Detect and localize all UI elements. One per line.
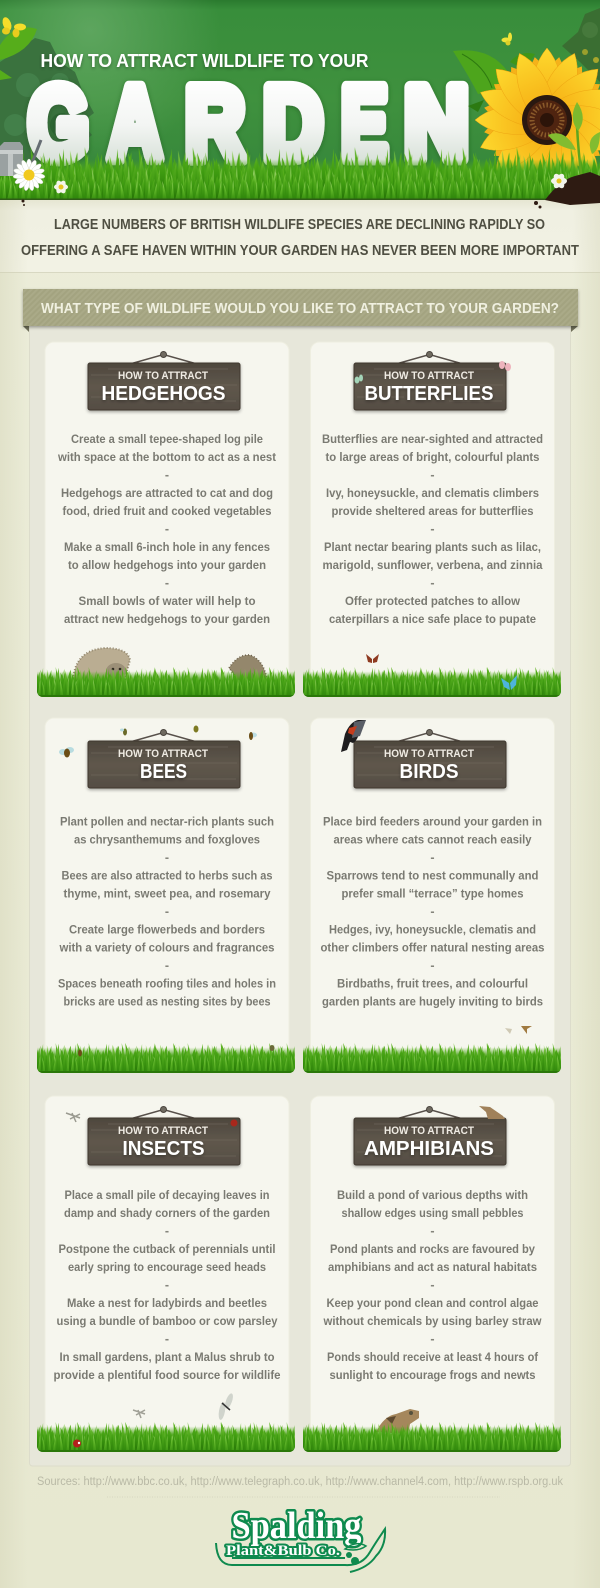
icon: toad on sign	[479, 1106, 505, 1119]
header banner	[0, 0, 600, 208]
icon: blue butterfly	[501, 675, 517, 690]
sign: birds	[354, 730, 506, 788]
sign: butterflies: HOW TO ATTRACT	[384, 370, 474, 382]
text: bird tips: Sparrows tend to nest communally and	[326, 868, 538, 882]
icon: bee 2	[120, 728, 127, 736]
text: insect tips: -	[165, 1278, 169, 1292]
text: bird tips: Hedges, ivy, honeysuckle, clematis and	[329, 922, 536, 936]
text: butterfly tips: Butterflies are near-sighted and attracted	[322, 432, 543, 446]
text: butterfly tips: to large areas of bright, colourful plants	[326, 450, 540, 464]
text: amphibian tips: without chemicals by using barley straw	[323, 1314, 542, 1328]
text: hedgehog tips	[57, 432, 276, 626]
text: amphibian tips	[323, 1188, 542, 1382]
text: bird tips: Place bird feeders around your garden in	[323, 814, 542, 828]
text: bird tips: -	[430, 904, 435, 918]
title: GARDEN: D	[263, 66, 323, 182]
text: butterfly tips: caterpillars a nice safe place to pupate	[329, 612, 536, 626]
panel: insects	[37, 1096, 295, 1452]
sign: hedgehogs: HOW TO ATTRACT	[118, 370, 208, 382]
text: amphibian tips: Build a pond of various depths with	[337, 1188, 528, 1202]
text: amphibian tips: -	[430, 1332, 435, 1346]
text: bee tips: -	[165, 958, 169, 972]
text: insect tips: early spring to encourage seed heads	[68, 1260, 266, 1274]
text: insect tips: -	[165, 1224, 169, 1238]
text: hedgehog tips: -	[165, 522, 169, 536]
text: insect tips: using a bundle of bamboo or cow parsley	[56, 1314, 278, 1328]
text: butterfly tips: provide sheltered areas for butterflies	[332, 504, 534, 518]
sign: amphibians: HOW TO ATTRACT	[384, 1125, 474, 1137]
text: bird tips: -	[430, 850, 435, 864]
banner sky	[0, 0, 600, 200]
heading ribbon: WHAT TYPE OF WILDLIFE WOULD YOU LIKE TO ATTRACT TO YOUR GARDEN?	[41, 301, 559, 317]
sign: birds: HOW TO ATTRACT	[384, 748, 474, 760]
sign: amphibians: AMPHIBIANS	[364, 1138, 494, 1160]
text: bee tips: thyme, mint, sweet pea, and rosemary	[64, 886, 271, 900]
text: bird tips: -	[430, 958, 435, 972]
text: insect tips: -	[165, 1332, 169, 1346]
grass: amphibians	[303, 1419, 561, 1452]
text: bee tips: bricks are used as nesting sites by bees	[64, 994, 271, 1008]
panel: hedgehogs	[37, 342, 295, 698]
icon: mosquito	[66, 1113, 80, 1122]
sign: butterflies: BUTTERFLIES	[364, 383, 494, 405]
header grass	[0, 142, 600, 200]
grass: birds	[303, 1040, 561, 1074]
intro text: LARGE NUMBERS OF BRITISH WILDLIFE SPECIES ARE DECLINING RAPIDLY SO	[54, 217, 545, 233]
title: GARDEN: E	[341, 66, 388, 182]
text: butterfly tips: marigold, sunflower, verbena, and zinnia	[322, 558, 543, 572]
icon: bee 3	[194, 726, 198, 732]
daisy small	[54, 179, 68, 195]
text: bird tips: garden plants are hugely inviting to birds	[322, 994, 543, 1008]
text: bee tips	[58, 814, 276, 1008]
text: amphibian tips: sunlight to encourage frogs and newts	[330, 1368, 536, 1382]
icon: large hedgehog	[73, 648, 130, 682]
watering can	[0, 140, 41, 176]
icon: bee 4	[249, 732, 257, 740]
text: bird tips	[320, 814, 545, 1008]
title: GARDEN: N	[404, 66, 469, 182]
icon: small hedgehog	[229, 655, 267, 680]
sign: insects: INSECTS	[122, 1138, 204, 1160]
text: bee tips: Bees are also attracted to herbs such as	[62, 868, 273, 882]
icon: teal butterfly	[354, 374, 363, 384]
text: bee tips: with a variety of colours and fragrances	[59, 940, 275, 954]
seedling	[548, 102, 600, 180]
text: bird tips: prefer small “terrace” type homes	[342, 886, 524, 900]
daisy on soil	[551, 172, 567, 190]
text: amphibian tips: shallow edges using small pebbles	[342, 1206, 524, 1220]
panel: amphibians	[303, 1096, 561, 1452]
text: hedgehog tips: Hedgehogs are attracted to cat and dog	[61, 486, 273, 500]
title: GARDEN: R	[185, 66, 245, 182]
icon: toad in grass	[376, 1409, 419, 1434]
panel: butterflies	[303, 342, 561, 698]
text: hedgehog tips: Make a small 6-inch hole in any fences	[64, 540, 270, 554]
text: amphibian tips: Ponds should receive at least 4 hours of	[327, 1350, 539, 1364]
text: hedgehog tips: to allow hedgehogs into your garden	[68, 558, 266, 572]
text: insect tips: In small gardens, plant a Malus shrub to	[60, 1350, 274, 1364]
text: hedgehog tips: with space at the bottom to act as a nest	[57, 450, 276, 464]
text: amphibian tips: amphibians and act as natural habitats	[328, 1260, 537, 1274]
icon: ladybird in grass	[73, 1440, 81, 1448]
content container	[30, 320, 570, 1466]
grass: hedgehogs	[37, 664, 295, 698]
panel: birds	[303, 718, 561, 1074]
text: bee tips: Plant pollen and nectar-rich plants such	[60, 814, 274, 828]
heading ribbon	[23, 289, 578, 332]
icon: ladybird on sign	[230, 1120, 238, 1126]
text: bee tips: -	[165, 850, 169, 864]
text: hedgehog tips: -	[165, 468, 169, 482]
intro text	[21, 217, 579, 259]
logo subline: Plant&Bulb Co.	[226, 1543, 340, 1559]
text: bee tips: as chrysanthemums and foxgloves	[74, 832, 260, 846]
text: insect tips: provide a plentiful food source for wildlife	[54, 1368, 281, 1382]
icon: small mosquito	[133, 1410, 145, 1418]
daisy large	[13, 159, 45, 191]
icon: small birds	[505, 1026, 532, 1034]
text: bee tips: Create large flowerbeds and borders	[69, 922, 265, 936]
text: bee tips: -	[165, 904, 169, 918]
text: butterfly tips: Ivy, honeysuckle, and clematis climbers	[326, 486, 539, 500]
text: insect tips: Place a small pile of decaying leaves in	[64, 1188, 270, 1202]
icon: bee 5	[78, 1050, 82, 1056]
leaf behind sunflower	[453, 50, 535, 112]
text: bird tips: areas where cats cannot reach easily	[334, 832, 532, 846]
icon: red butterfly	[366, 654, 379, 663]
sign: bees: BEES	[140, 761, 187, 783]
sign: hedgehogs: HEDGEHOGS	[102, 383, 226, 405]
sign: bees	[88, 730, 240, 788]
icon: dragonfly	[217, 1392, 235, 1420]
grass: bees	[37, 1040, 295, 1074]
sign: butterflies	[354, 352, 506, 410]
icon: pink butterfly	[499, 361, 511, 371]
icon: bee 6	[270, 1045, 274, 1051]
text: hedgehog tips: Small bowls of water will help to	[78, 594, 256, 608]
text: hedgehog tips: -	[165, 576, 169, 590]
right tree	[562, 8, 600, 82]
text: amphibian tips: -	[430, 1278, 435, 1292]
panel: bees	[37, 718, 295, 1074]
sunflower	[475, 48, 600, 192]
text: amphibian tips: Keep your pond clean and control algae	[326, 1296, 539, 1310]
sign: insects: HOW TO ATTRACT	[118, 1125, 208, 1137]
text: insect tips: Make a nest for ladybirds and beetles	[67, 1296, 267, 1310]
sources: Sources: http://www.bbc.co.uk, http://www.telegraph.co.uk, http://www.channel4.com, http://www.rspb.org.uk	[37, 1476, 563, 1488]
text: amphibian tips: -	[430, 1224, 435, 1238]
text: bird tips: Birdbaths, fruit trees, and colourful	[337, 976, 528, 990]
text: insect tips	[54, 1188, 281, 1382]
sign: birds: BIRDS	[400, 761, 458, 783]
title: GARDEN	[28, 66, 469, 182]
logo wordmark: Spalding	[232, 1505, 362, 1547]
logo swoosh	[216, 1529, 385, 1572]
title: how to attract: HOW TO ATTRACT WILDLIFE TO YOUR	[40, 50, 368, 71]
text: insect tips: Postpone the cutback of perennials until	[58, 1242, 276, 1256]
sign: amphibians	[354, 1106, 506, 1165]
left tree	[0, 38, 94, 165]
text: butterfly tips	[322, 432, 543, 626]
logo: Spalding Plant & Bulb Co.	[216, 1505, 385, 1572]
grass: butterflies	[303, 664, 561, 698]
text: butterfly tips: -	[430, 522, 435, 536]
yellow butterfly right	[502, 32, 512, 46]
text: butterfly tips: Offer protected patches to allow	[345, 594, 520, 608]
text: butterfly tips: Plant nectar bearing plants such as lilac,	[324, 540, 541, 554]
logo flower	[345, 1544, 366, 1565]
title: GARDEN: G	[28, 66, 89, 182]
text: butterfly tips: -	[430, 468, 435, 482]
text: hedgehog tips: food, dried fruit and cooked vegetables	[62, 504, 272, 518]
icon: bee 1	[59, 747, 74, 758]
sign: bees: HOW TO ATTRACT	[118, 748, 208, 760]
yellow butterfly left	[0, 16, 37, 80]
text: bee tips: Spaces beneath roofing tiles and holes in	[58, 976, 276, 990]
text: amphibian tips: Pond plants and rocks are favoured by	[330, 1242, 535, 1256]
sign: hedgehogs	[88, 352, 240, 410]
soil	[22, 172, 600, 208]
title: GARDEN: A	[108, 66, 162, 182]
text: hedgehog tips: Create a small tepee-shaped log pile	[71, 432, 263, 446]
text: hedgehog tips: attract new hedgehogs to your garden	[64, 612, 270, 626]
sign: insects	[88, 1106, 240, 1165]
icon: blackbird	[341, 720, 366, 752]
text: bird tips: other climbers offer natural nesting areas	[320, 940, 545, 954]
grass: insects	[37, 1419, 295, 1452]
text: insect tips: damp and shady corners of the garden	[64, 1206, 270, 1220]
text: butterfly tips: -	[430, 576, 435, 590]
